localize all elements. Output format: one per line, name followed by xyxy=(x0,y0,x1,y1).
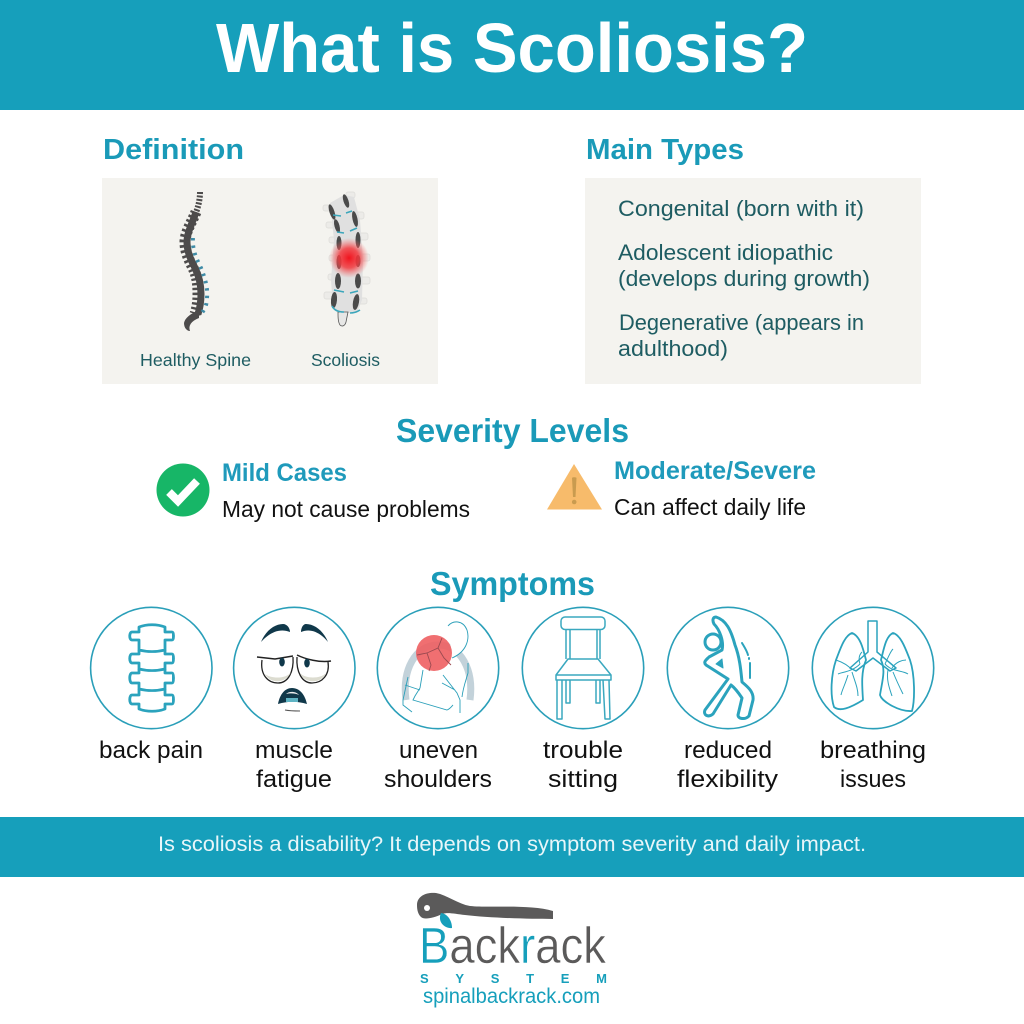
icon: lungs xyxy=(832,621,914,711)
symptom: reduced flexibility xyxy=(667,607,789,793)
icon: chair xyxy=(556,617,611,719)
label: uneven shoulders: uneven xyxy=(399,737,478,764)
moderate description: Can affect daily life xyxy=(614,494,806,520)
logo: Backrack System xyxy=(417,893,607,1008)
type: adolescent idiopathic: (develops during growth) xyxy=(618,266,870,291)
severity: moderate or severe xyxy=(547,457,816,520)
label: breathing issues xyxy=(820,737,926,793)
label: trouble sitting: trouble xyxy=(543,737,623,764)
banner text: Is scoliosis a disability? It depends on symptom severity and daily impact. xyxy=(158,833,866,856)
panel: definition xyxy=(102,178,438,384)
label: muscle fatigue: muscle xyxy=(255,737,333,764)
mild heading: Mild Cases xyxy=(222,459,347,487)
icon: green check xyxy=(156,464,210,516)
type: congenital: Congenital (born with it) xyxy=(618,196,864,221)
label: muscle fatigue: fatigue xyxy=(256,766,332,793)
icon: stretching figure xyxy=(705,617,753,719)
heading: symptoms: Symptoms xyxy=(430,565,595,602)
label: reduced flexibility: flexibility xyxy=(677,766,778,793)
label: trouble sitting xyxy=(543,737,623,793)
label: uneven shoulders: shoulders xyxy=(384,766,492,793)
footer banner xyxy=(0,817,1024,877)
header banner xyxy=(0,0,1024,110)
heading: definition: Definition xyxy=(103,134,244,166)
title: What is Scoliosis? xyxy=(216,9,808,87)
website: spinalbackrack.com xyxy=(423,985,600,1008)
label: uneven shoulders xyxy=(384,737,492,793)
icon: vertebrae xyxy=(130,625,174,711)
mild description: May not cause problems xyxy=(222,496,470,522)
type: degenerative xyxy=(618,310,864,361)
icon: warning triangle xyxy=(547,464,602,510)
heading: main types: Main Types xyxy=(586,134,744,166)
label: breathing issues: breathing xyxy=(820,737,926,764)
label: scoliosis: Scoliosis xyxy=(311,350,380,370)
logo system text: SYSTEM xyxy=(420,971,607,986)
heading: severity levels: Severity Levels xyxy=(396,412,629,449)
icon: tired face xyxy=(257,624,331,711)
type: degenerative: Degenerative (appears in xyxy=(619,310,864,335)
label: muscle fatigue xyxy=(255,737,333,793)
label: reduced flexibility: reduced xyxy=(684,737,772,764)
label: breathing issues: issues xyxy=(840,766,906,793)
label: trouble sitting: sitting xyxy=(548,766,618,793)
type: degenerative: adulthood) xyxy=(618,336,728,361)
type: adolescent idiopathic xyxy=(618,240,870,291)
logo wordmark: Backrack xyxy=(419,917,606,974)
label: healthy spine: Healthy Spine xyxy=(140,350,251,370)
type: adolescent idiopathic: Adolescent idiopathic xyxy=(618,240,833,265)
severity: mild cases xyxy=(156,459,470,522)
label: back pain: back pain xyxy=(99,737,203,764)
illustration: scoliosis spine xyxy=(323,192,370,326)
logo mark xyxy=(417,893,553,928)
illustration: healthy spine xyxy=(184,192,207,331)
symptom: uneven shoulders xyxy=(377,607,499,793)
symptom: back pain xyxy=(91,607,212,764)
moderate heading: Moderate/Severe xyxy=(614,457,816,485)
symptom: muscle fatigue xyxy=(234,607,355,793)
symptom: trouble sitting xyxy=(522,607,644,793)
icon: shoulder pain figure xyxy=(403,622,471,713)
label: reduced flexibility xyxy=(677,737,778,793)
panel: main types xyxy=(585,178,921,384)
symptom: breathing issues xyxy=(812,607,934,793)
